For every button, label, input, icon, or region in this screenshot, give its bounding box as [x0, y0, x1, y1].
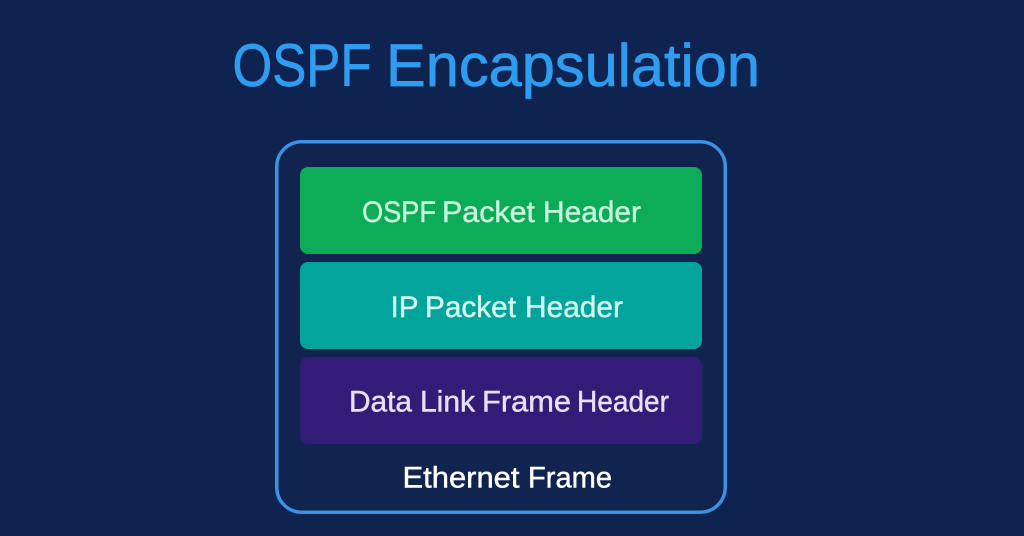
panel: IP packet header — [300, 262, 702, 349]
label: data link frame header — [349, 386, 669, 418]
label: Ethernet frame: Ethernet — [402, 462, 520, 494]
label: data link frame header: Header — [577, 386, 669, 418]
label: IP packet header: IP — [390, 291, 418, 324]
panel: Ethernet frame outline — [277, 142, 725, 512]
title: Encapsulation — [386, 32, 760, 99]
label: IP packet header — [390, 291, 623, 324]
label: OSPF packet header: Header — [543, 196, 641, 229]
label: Ethernet frame — [402, 462, 612, 494]
label: OSPF packet header: Packet — [442, 196, 536, 229]
label: Ethernet frame: Frame — [528, 462, 612, 494]
label: data link frame header: Link — [420, 386, 476, 418]
label: IP packet header: Header — [525, 291, 623, 324]
label: OSPF packet header: OSPF — [362, 196, 436, 229]
label: data link frame header: Frame — [482, 386, 571, 418]
label: IP packet header: Packet — [425, 291, 517, 324]
panel: data link frame header — [300, 357, 702, 444]
panel: OSPF packet header — [300, 167, 702, 254]
label: OSPF packet header — [362, 196, 641, 229]
title: OSPF — [232, 32, 372, 99]
label: data link frame header: Data — [349, 386, 412, 418]
